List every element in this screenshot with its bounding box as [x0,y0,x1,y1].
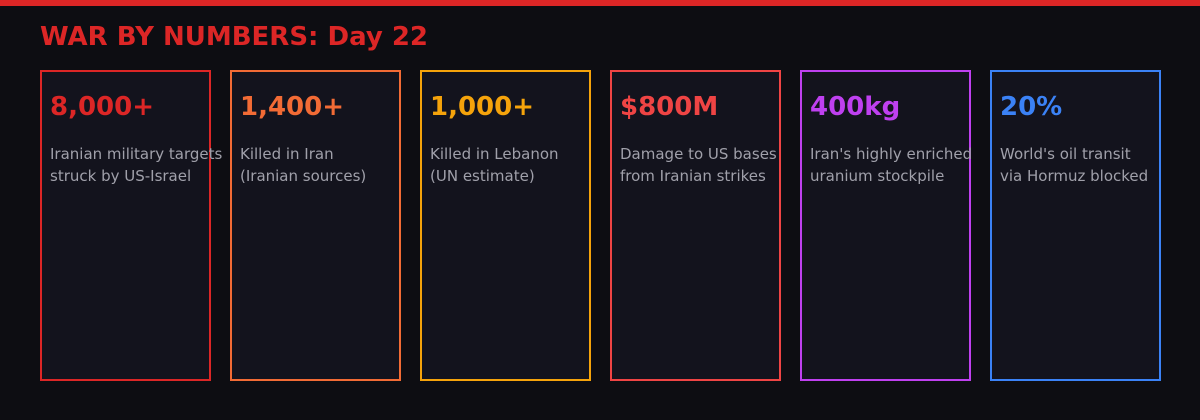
card: uranium stockpile: uranium stockpile [810,167,944,185]
card: Hormuz oil: World's oil transit [1000,145,1131,163]
card: uranium stockpile: Iran's highly enriched [810,145,972,163]
top accent bar [0,0,1200,6]
card: killed in Iran: Killed in Iran [240,145,334,163]
card: killed in Iran: (Iranian sources) [240,167,366,185]
card: damage to US bases: from Iranian strikes [620,167,766,185]
card: Hormuz oil: via Hormuz blocked [1000,167,1148,185]
card: Hormuz oil: 20% [1000,92,1062,122]
card: damage to US bases [611,71,780,380]
card: targets struck: 8,000+ [50,92,154,122]
card: killed in Lebanon [421,71,590,380]
card: Hormuz oil [991,71,1160,380]
card: targets struck [41,71,223,380]
card: uranium stockpile [801,71,972,380]
card: damage to US bases: Damage to US bases [620,145,777,163]
card: killed in Lebanon: Killed in Lebanon [430,145,559,163]
card: targets struck: struck by US-Israel [50,167,191,185]
card: targets struck: Iranian military targets [50,145,223,163]
card: uranium stockpile: 400kg [810,92,900,122]
card: killed in Lebanon: (UN estimate) [430,167,535,185]
title: WAR BY NUMBERS: Day 22 [40,22,428,52]
card: damage to US bases: $800M [620,92,718,122]
card: killed in Lebanon: 1,000+ [430,92,534,122]
card: killed in Iran: 1,400+ [240,92,344,122]
card: killed in Iran [231,71,400,380]
